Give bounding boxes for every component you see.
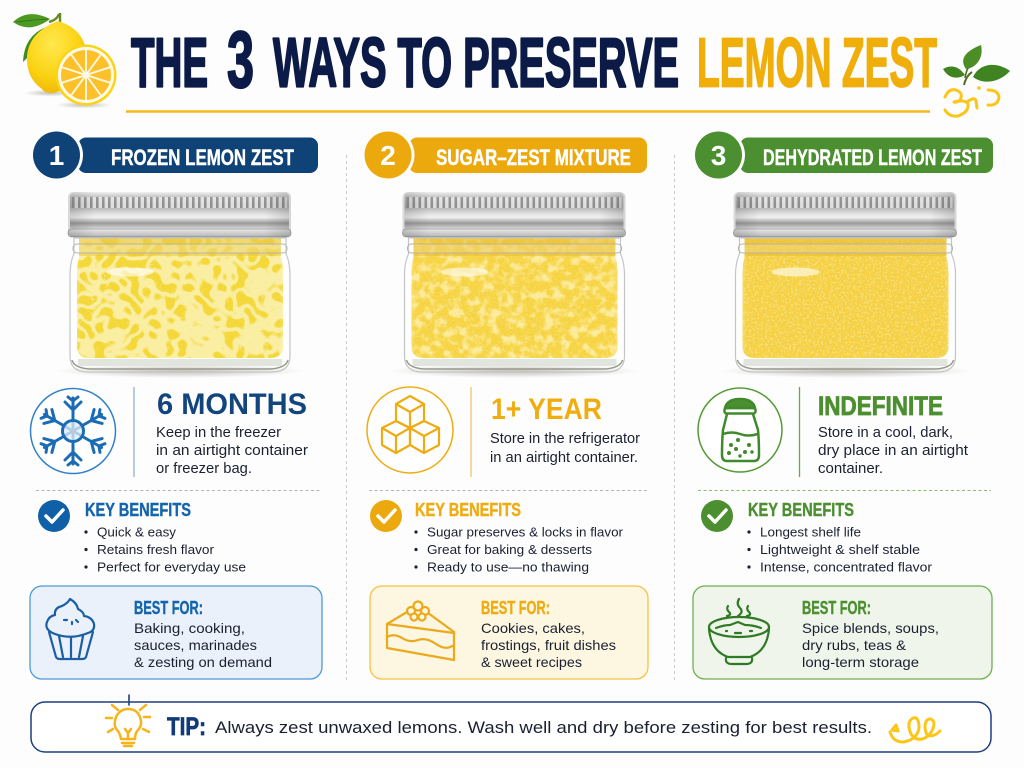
storage: 6 months: Keep in the freezer	[156, 425, 281, 441]
storage: 6 months	[134, 387, 308, 477]
best for box: sauces, marinades	[134, 637, 257, 653]
best for box: Spice blends, soups,	[802, 620, 939, 636]
header: sugar-zest mixture	[362, 128, 647, 182]
icon: zest curl	[890, 718, 940, 742]
panel: dehydrated lemon zest	[692, 128, 993, 679]
jar: sugar zest	[402, 192, 626, 377]
best for box	[30, 586, 322, 679]
column divider right	[674, 155, 676, 680]
header: frozen lemon zest: 1	[49, 140, 64, 171]
best for box: & zesting on demand	[134, 654, 272, 670]
icon: soup bowl	[709, 599, 769, 664]
key benefits	[701, 500, 933, 574]
key benefits	[38, 500, 246, 574]
best for box	[693, 586, 992, 679]
jar: dehydrated zest	[733, 192, 957, 377]
storage: indefinite: container.	[818, 461, 883, 477]
storage: indefinite	[800, 387, 968, 477]
key benefits: Perfect for everyday use	[97, 560, 246, 574]
key benefits: Ready to use—no thawing	[427, 560, 589, 574]
key benefits: Retains fresh flavor	[97, 542, 215, 557]
storage: 1+ year: in an airtight container.	[490, 450, 638, 466]
key benefits: Quick & easy	[97, 524, 177, 540]
storage: indefinite: dry place in an airtight	[818, 443, 968, 459]
key benefits: Lightweight & shelf stable	[760, 542, 920, 557]
title	[131, 15, 937, 104]
icon: cake slice	[387, 602, 454, 660]
header: sugar-zest mixture: 2	[380, 140, 396, 171]
storage: 6 months: 6 MONTHS	[157, 388, 307, 421]
icon: lemons top left	[13, 13, 116, 108]
key benefits: Intense, concentrated flavor	[760, 560, 933, 574]
best for box: dry rubs, teas &	[802, 637, 907, 653]
icon: leaves and zest curls top right	[943, 45, 1010, 116]
jar: frozen zest	[68, 192, 292, 377]
icon: spice shaker	[698, 388, 782, 472]
storage: 1+ year: 1+ YEAR	[491, 393, 602, 426]
panel: sugar-zest mixture	[362, 128, 649, 679]
storage: 6 months: in an airtight container	[156, 443, 308, 459]
title: 3	[227, 15, 254, 104]
icon: light bulb	[106, 695, 150, 746]
tip bar: TIP:	[167, 713, 206, 741]
best for box: BEST FOR:	[134, 598, 203, 618]
icon: snowflake	[30, 388, 116, 474]
best for box: frostings, fruit dishes	[481, 637, 616, 653]
tip bar	[31, 695, 991, 752]
best for box	[370, 586, 648, 679]
title underline	[126, 110, 930, 113]
key benefits: Great for baking & desserts	[427, 542, 593, 557]
storage: indefinite: Store in a cool, dark,	[818, 425, 953, 441]
storage: 6 months: or freezer bag.	[156, 461, 252, 477]
title: THE	[131, 24, 208, 102]
best for box: long-term storage	[802, 654, 919, 670]
header: frozen lemon zest: FROZEN LEMON ZEST	[111, 145, 294, 170]
best for box: BEST FOR:	[802, 598, 871, 618]
panel: frozen lemon zest	[30, 128, 322, 679]
best for box: Baking, cooking,	[134, 620, 245, 636]
header: frozen lemon zest	[30, 128, 318, 182]
icon: sugar cubes	[367, 387, 453, 473]
icon: cupcake	[46, 599, 94, 659]
header: sugar-zest mixture: SUGAR–ZEST MIXTURE	[436, 145, 631, 170]
key benefits: KEY BENEFITS	[85, 500, 191, 520]
header: dehydrated lemon zest: 3	[711, 140, 726, 171]
storage: 1+ year	[471, 387, 640, 477]
storage: indefinite: INDEFINITE	[818, 391, 943, 421]
key benefits	[370, 500, 624, 574]
header: dehydrated lemon zest	[692, 128, 993, 182]
key benefits: Longest shelf life	[760, 524, 861, 540]
best for box: & sweet recipes	[481, 654, 582, 670]
key benefits: Sugar preserves & locks in flavor	[427, 524, 624, 540]
best for box: BEST FOR:	[481, 598, 550, 618]
title: WAYS TO PRESERVE	[273, 24, 679, 102]
tip bar: Always zest unwaxed lemons. Wash well and dry before zesting for best results.	[215, 718, 872, 737]
storage: 1+ year: Store in the refrigerator	[490, 431, 640, 447]
column divider left	[346, 155, 348, 680]
key benefits: KEY BENEFITS	[748, 500, 854, 520]
key benefits: KEY BENEFITS	[415, 500, 521, 520]
best for box: Cookies, cakes,	[481, 620, 585, 636]
